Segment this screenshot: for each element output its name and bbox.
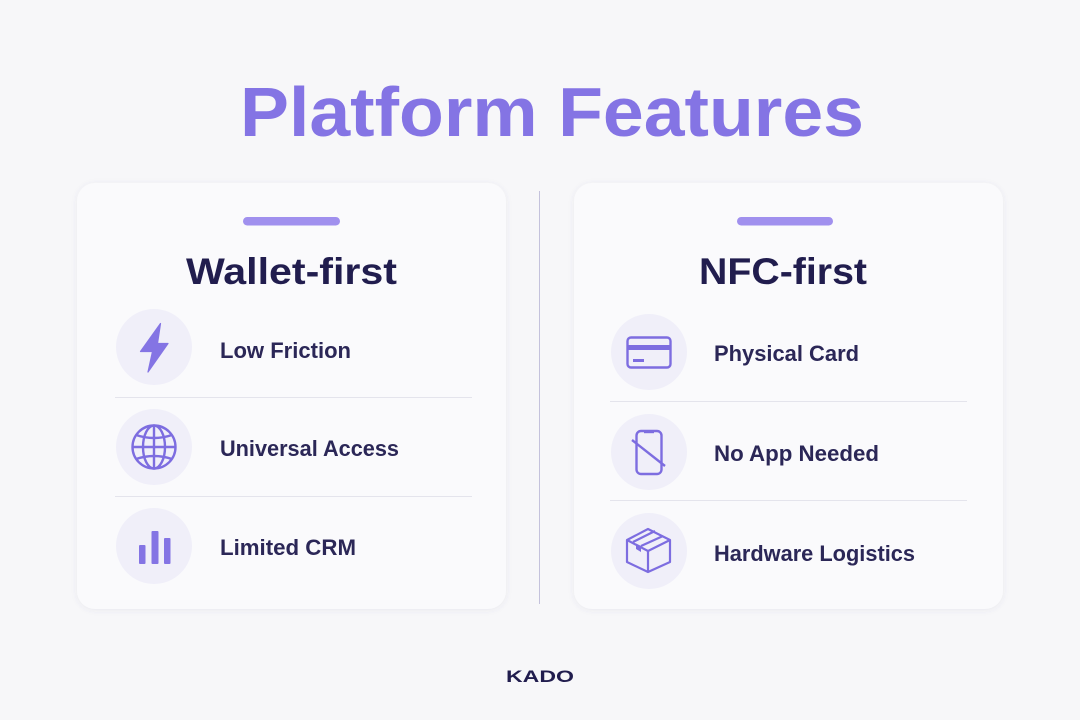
label: Low Friction: Low Friction <box>220 338 351 363</box>
accent bar: NFC-first <box>737 217 833 226</box>
label: No App Needed: No App Needed <box>714 441 879 466</box>
accent bar: Wallet-first <box>243 217 340 226</box>
icon: no phone <box>611 414 687 490</box>
icon: bar chart <box>116 508 192 584</box>
panel: NFC-first <box>574 183 1003 609</box>
heading: NFC-first: NFC-first <box>699 251 867 292</box>
label: Physical Card: Physical Card <box>714 341 859 366</box>
label: Limited CRM: Limited CRM <box>220 535 356 560</box>
icon: globe <box>116 409 192 485</box>
icon: lightning bolt <box>116 309 192 385</box>
label: Universal Access: Universal Access <box>220 436 399 461</box>
heading: Wallet-first: Wallet-first <box>186 251 397 292</box>
icon: box <box>611 513 687 589</box>
title: Platform Features <box>240 73 864 151</box>
panel: Wallet-first <box>77 183 506 609</box>
icon: card <box>611 314 687 390</box>
label: Hardware Logistics: Hardware Logistics <box>714 541 915 566</box>
logo: KADO: KADO <box>506 668 574 686</box>
